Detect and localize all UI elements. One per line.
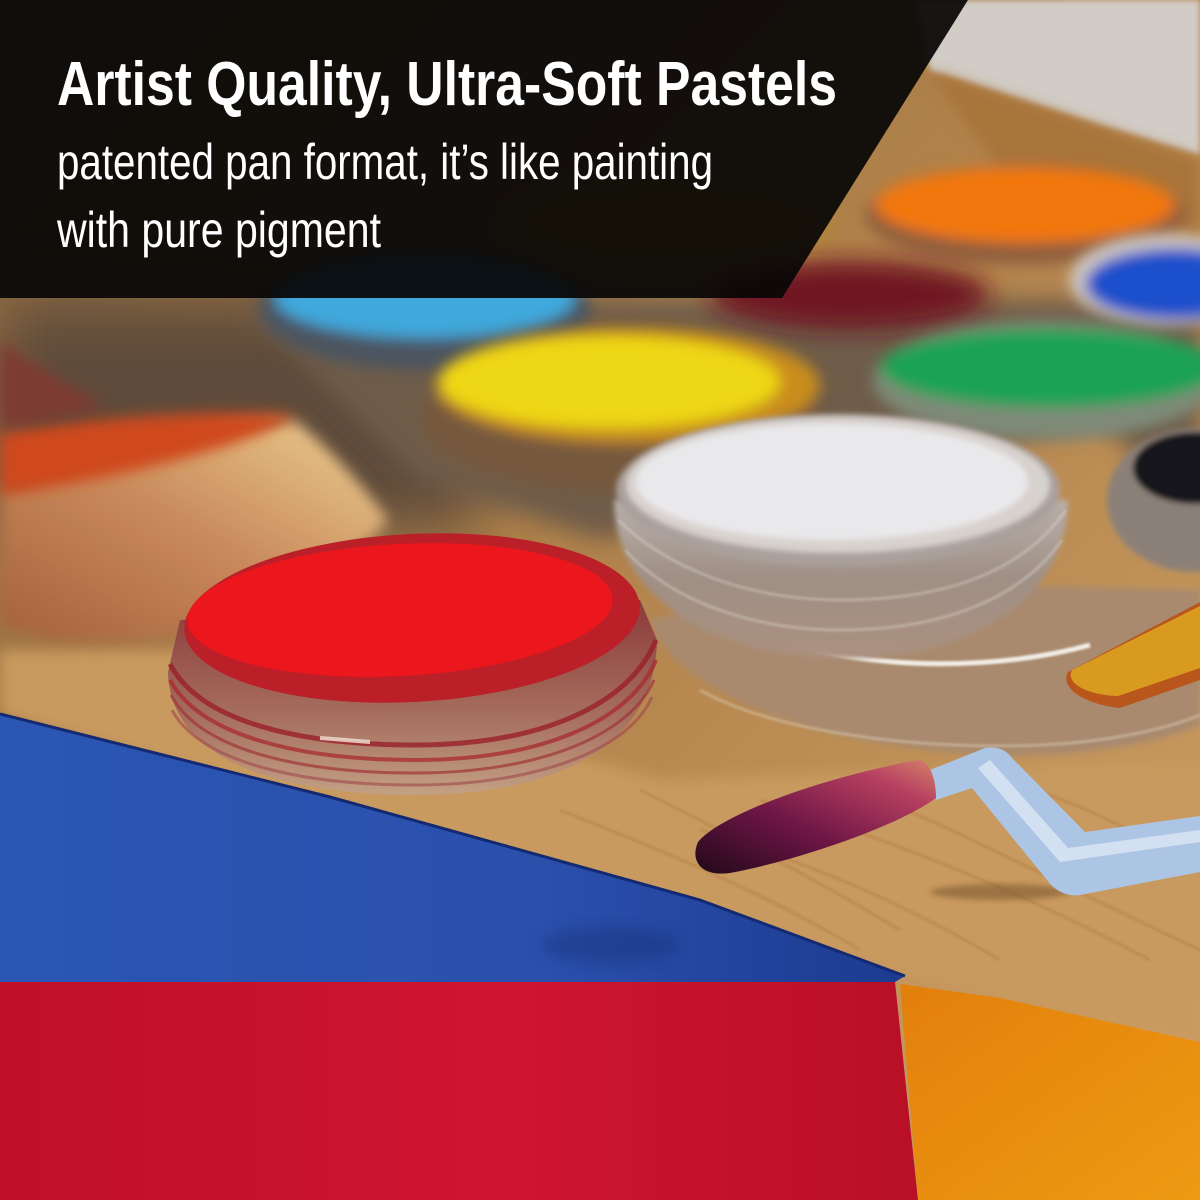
black header banner xyxy=(0,0,968,298)
clear palette base xyxy=(650,580,1200,755)
pan: green xyxy=(873,320,1200,440)
orange paper xyxy=(900,984,1200,1200)
yellow sponge tip xyxy=(1066,602,1200,708)
pan: dim ochre behind banner xyxy=(505,178,825,266)
pan: black xyxy=(1107,428,1200,572)
red paper xyxy=(0,982,918,1200)
subtitle line one: patented pan format, it’s like painting xyxy=(57,134,713,190)
pan: orange xyxy=(865,165,1185,265)
pan: white xyxy=(614,414,1068,658)
pan: blue xyxy=(1070,234,1200,326)
pan: light blue xyxy=(260,250,590,370)
pan: dark red xyxy=(710,261,990,329)
blue paper xyxy=(0,714,905,982)
subtitle line two: with pure pigment xyxy=(56,202,381,258)
pan: yellow xyxy=(420,327,820,492)
title: Artist Quality, Ultra-Soft Pastels xyxy=(57,50,837,119)
palette tray, blurred shadows xyxy=(240,300,1200,540)
blending tool xyxy=(695,747,1200,900)
pan: red xyxy=(168,522,657,795)
pastel chunk at left xyxy=(0,340,388,641)
